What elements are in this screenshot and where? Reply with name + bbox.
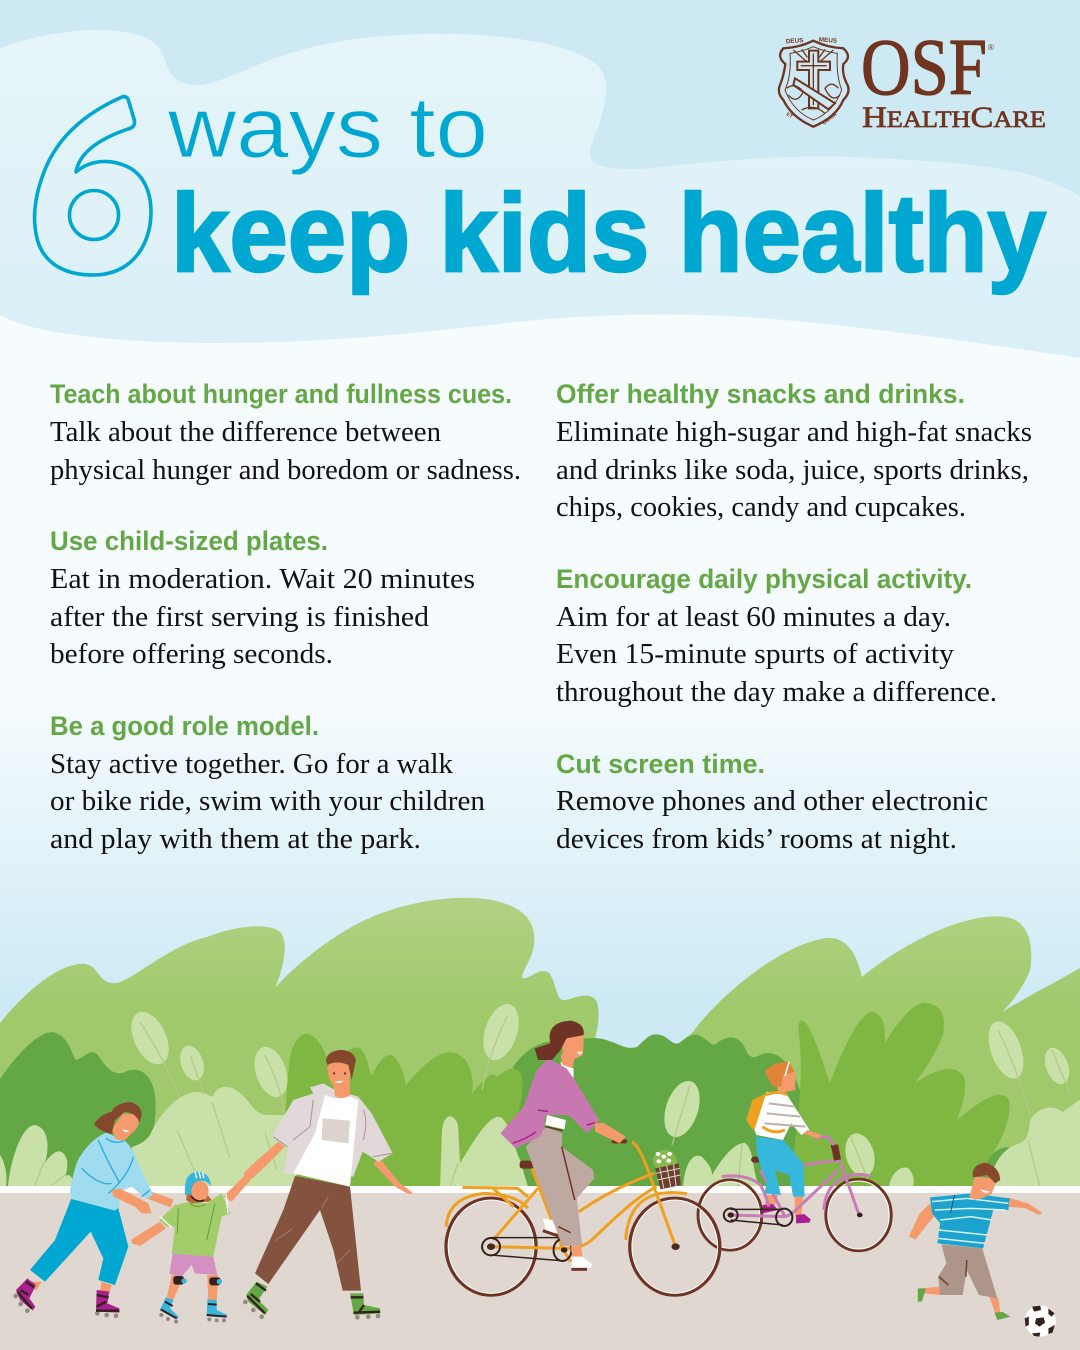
logo: OSF HealthCare bbox=[779, 24, 1046, 134]
tip: hunger and fullness cues: Talk about the difference between bbox=[50, 417, 441, 448]
dark green shrubs bbox=[0, 1032, 1015, 1190]
big outlined number 6 bbox=[35, 97, 151, 275]
tip: child-sized plates: before offering seconds. bbox=[50, 639, 333, 670]
tip: cut screen time: Cut screen time. bbox=[556, 749, 765, 779]
icon: crest: MEUS bbox=[818, 36, 837, 45]
tip: child-sized plates: after the first serving is finished bbox=[50, 602, 429, 633]
tip: daily physical activity: Encourage daily physical activity. bbox=[556, 564, 972, 594]
tip: daily physical activity: Even 15-minute spurts of activity bbox=[556, 639, 954, 670]
tip: hunger and fullness cues bbox=[50, 379, 521, 486]
tip: daily physical activity: Aim for at least 60 minutes a day. bbox=[556, 602, 951, 633]
panel: right column tips bbox=[556, 379, 1032, 855]
tip: healthy snacks and drinks bbox=[556, 379, 1032, 523]
tip: healthy snacks and drinks: and drinks like soda, juice, sports drinks, bbox=[556, 455, 1029, 486]
tip: role model: and play with them at the park. bbox=[50, 824, 421, 855]
leaves bbox=[34, 999, 1074, 1187]
icon: crest: DEUS bbox=[786, 37, 804, 45]
family on roller skates bbox=[13, 1050, 413, 1324]
medium green shrubs bbox=[280, 1003, 1009, 1190]
panel: left column tips bbox=[50, 379, 521, 855]
tip: cut screen time bbox=[556, 749, 988, 855]
background hills bbox=[0, 898, 1080, 1195]
park scene illustration bbox=[0, 898, 1080, 1350]
title bbox=[35, 80, 1046, 295]
logo wordmark OSF: OSF bbox=[861, 24, 987, 112]
woman on orange bicycle bbox=[446, 1021, 720, 1295]
tip: role model: Be a good role model. bbox=[50, 711, 319, 741]
tip: daily physical activity bbox=[556, 564, 997, 708]
header sky background bbox=[0, 0, 1080, 382]
flower basket bbox=[652, 1150, 681, 1189]
tip: child-sized plates: Eat in moderation. Wait 20 minutes bbox=[50, 564, 475, 595]
child on pink bicycle bbox=[698, 1062, 891, 1251]
child on skates bbox=[132, 1172, 251, 1324]
road bbox=[0, 1193, 1080, 1350]
tip: child-sized plates: Use child-sized plates. bbox=[50, 526, 328, 556]
tip: daily physical activity: throughout the day make a difference. bbox=[556, 677, 997, 708]
tip: healthy snacks and drinks: chips, cookies, candy and cupcakes. bbox=[556, 492, 966, 523]
tip: cut screen time: devices from kids’ rooms at night. bbox=[556, 824, 957, 855]
pale green bushes bbox=[0, 1087, 1080, 1187]
path white edge bbox=[0, 1186, 1080, 1193]
tip: cut screen time: Remove phones and other electronic bbox=[556, 786, 988, 817]
lower sky gradient bbox=[0, 705, 1080, 1200]
soccer ball bbox=[1025, 1305, 1056, 1337]
title line: ways to: ways to bbox=[167, 80, 488, 176]
logo wordmark HealthCare: HEALTH CARE bbox=[862, 101, 1046, 134]
tip: hunger and fullness cues: physical hunger and boredom or sadness. bbox=[50, 455, 521, 486]
tip: hunger and fullness cues: Teach about hunger and fullness cues. bbox=[50, 379, 512, 409]
tip: role model bbox=[50, 711, 485, 855]
tip: child-sized plates bbox=[50, 526, 475, 670]
tip: healthy snacks and drinks: Offer healthy snacks and drinks. bbox=[556, 379, 965, 409]
title line: keep kids healthy: keep kids healthy bbox=[171, 172, 1046, 295]
registered mark: ® bbox=[988, 43, 994, 52]
cyclists and boy bbox=[446, 1021, 1056, 1337]
tip: role model: Stay active together. Go for a walk bbox=[50, 749, 453, 780]
icon: crest: OMNIA bbox=[822, 111, 839, 127]
icon: crest bbox=[779, 36, 849, 127]
boy kicking ball bbox=[909, 1163, 1056, 1337]
icon: crest: ET bbox=[785, 112, 794, 120]
mother on skates bbox=[13, 1102, 173, 1318]
tip: healthy snacks and drinks: Eliminate high-sugar and high-fat snacks bbox=[556, 417, 1032, 448]
tip: role model: or bike ride, swim with your children bbox=[50, 786, 485, 817]
father on skates bbox=[243, 1050, 413, 1320]
